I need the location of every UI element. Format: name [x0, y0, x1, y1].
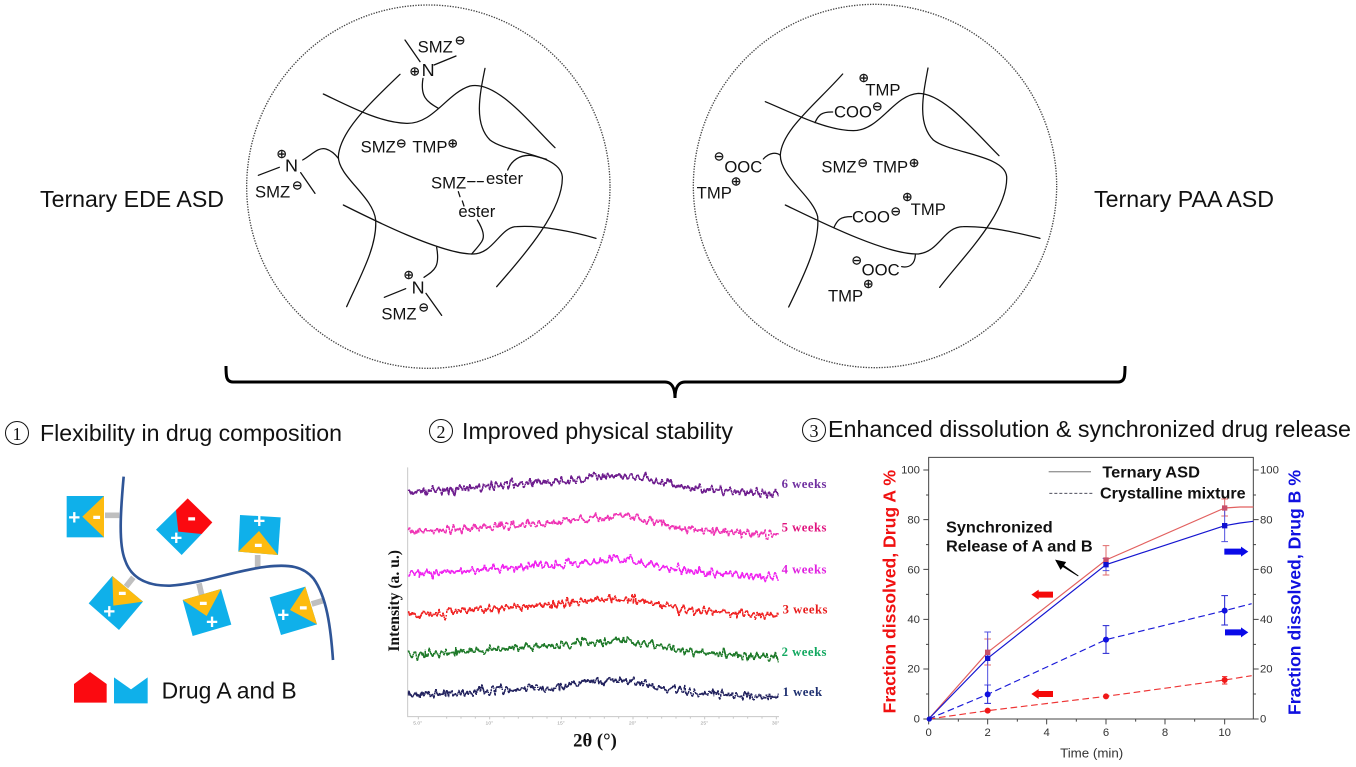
- label: Ternary EDE ASD: Ternary EDE ASD: [40, 186, 224, 212]
- arrow: black: [1056, 560, 1078, 576]
- heading 3: Enhanced dissolution & synchronized drug release: [828, 416, 1351, 442]
- chemical labels: ester: [486, 169, 523, 188]
- trace: 1 week: [408, 680, 778, 697]
- left axis numbers: 0: [914, 714, 920, 726]
- x axis title: Time (min): [1060, 745, 1123, 760]
- series labels: 1 week: [783, 685, 823, 699]
- x axis numbers: 0: [926, 727, 932, 739]
- series labels: [782, 477, 828, 699]
- chemical labels: ⊕: [858, 70, 869, 85]
- legend: drug A and B: Drug A and B: [162, 677, 297, 703]
- drug pair 6: [270, 587, 317, 635]
- chemical labels: ⊖: [418, 299, 429, 314]
- chemical labels: SMZ: [821, 157, 857, 176]
- drug pair 6: +: [277, 603, 289, 626]
- chemical labels: ⊖: [292, 178, 303, 193]
- series: drug B crystalline mixture: [929, 604, 1252, 719]
- chemical labels: [697, 70, 946, 306]
- polymer chains: [763, 68, 1040, 307]
- x axis numbers: 2: [985, 727, 991, 739]
- drug pair 1: -: [92, 500, 101, 530]
- right axis numbers: 60: [1260, 564, 1273, 576]
- series labels: 3 weeks: [783, 602, 828, 616]
- chemical labels: COO: [834, 103, 872, 122]
- origin marker: [927, 716, 932, 722]
- chemical labels: SMZ: [361, 137, 396, 156]
- trace: 3 weeks: [408, 599, 778, 616]
- chemical labels: ⊖: [396, 135, 407, 150]
- legend: drug A and B: [74, 672, 297, 703]
- trace: 4 weeks: [408, 559, 778, 577]
- x axis numbers: 6: [1103, 727, 1109, 739]
- right axis numbers: 40: [1260, 614, 1273, 626]
- tick labels: 20°: [629, 721, 636, 727]
- chemical labels: TMP: [865, 81, 901, 100]
- error bars: [984, 499, 1228, 703]
- drug pair 3: [238, 510, 281, 559]
- right axis numbers: 80: [1260, 514, 1273, 526]
- trace: 2 weeks: [408, 640, 778, 657]
- grey linkers: [105, 515, 325, 604]
- chemical labels: ⊕: [731, 173, 741, 188]
- chemical labels: ⊕: [276, 146, 287, 161]
- chemical labels: ⊕: [902, 189, 913, 204]
- right axis numbers: 20: [1260, 664, 1273, 676]
- series labels: 4 weeks: [782, 562, 827, 576]
- chart: XRD traces over time: [386, 467, 828, 752]
- chemical labels: SMZ: [418, 38, 453, 57]
- chemical labels: SMZ: [381, 304, 417, 323]
- right axis title: Fraction dissolved, Drug B %: [1285, 470, 1305, 715]
- plot frame and ticks: [923, 457, 1259, 724]
- arrow: red upper: [1031, 590, 1053, 600]
- drug pair 4: +: [103, 600, 115, 623]
- legend: Ternary ASD: [1102, 464, 1200, 481]
- x axis numbers: 8: [1162, 727, 1168, 739]
- chemical labels: ⊕: [403, 267, 414, 282]
- drug pair 5: -: [199, 586, 208, 616]
- drug pair 2: [156, 498, 212, 555]
- drug pair 5: +: [206, 611, 218, 634]
- tick labels: 5.0°: [413, 721, 422, 727]
- arrow: blue upper: [1224, 547, 1248, 557]
- heading 2: Improved physical stability: [462, 418, 733, 444]
- chemical labels: SMZ: [255, 183, 290, 202]
- heading 1: Flexibility in drug composition: [40, 420, 342, 446]
- chemical labels: ⊖: [851, 252, 862, 267]
- left axis numbers: 80: [907, 514, 920, 526]
- chemical labels: TMP: [873, 157, 908, 176]
- diagram: Ternary EDE ASD polymer network: [247, 5, 610, 368]
- chemical labels: ⊕: [409, 63, 420, 78]
- left axis numbers: [901, 464, 920, 726]
- legend: [1049, 464, 1246, 502]
- drug pair 5: [183, 586, 231, 636]
- chemical labels: TMP: [697, 184, 732, 203]
- chemical labels: ester: [458, 202, 496, 221]
- right axis numbers: 0: [1260, 714, 1266, 726]
- x axis numbers: 4: [1044, 727, 1050, 739]
- drug pair 1: +: [68, 506, 80, 529]
- chemical labels: COO: [852, 207, 890, 226]
- legend: Crystalline mixture: [1100, 485, 1246, 502]
- axes: [408, 467, 779, 719]
- diagram: Ternary PAA ASD polymer network: [693, 4, 1057, 368]
- heading 2: 2: [436, 422, 446, 442]
- x axis title: 2θ (°): [573, 731, 617, 752]
- chemical labels: N: [285, 156, 298, 176]
- y axis title: Intensity (a. u.): [386, 550, 403, 652]
- drug pair 6: -: [299, 591, 308, 621]
- tick labels: [413, 721, 779, 727]
- dotted circle: [247, 5, 610, 368]
- left axis numbers: 60: [907, 564, 920, 576]
- left axis numbers: 40: [907, 614, 920, 626]
- series: drug A ternary ASD: [929, 505, 1253, 719]
- chemical labels: TMP: [412, 137, 448, 156]
- chemical labels: ⊖: [890, 204, 901, 219]
- arrow: red lower: [1031, 689, 1053, 699]
- heading 1: 1: [12, 424, 22, 444]
- series: drug A crystalline mixture: [929, 676, 1252, 719]
- drug pair 2: +: [170, 526, 182, 549]
- polymer chains: [258, 40, 596, 315]
- drug pair 1: [67, 496, 104, 537]
- drug pair 3: +: [253, 510, 265, 533]
- trace: 6 weeks: [408, 475, 778, 493]
- chemical labels: TMP: [828, 287, 863, 306]
- chemical labels: OOC: [724, 157, 762, 176]
- label: Ternary PAA ASD: Ternary PAA ASD: [1094, 186, 1274, 212]
- curly brace: [226, 366, 1125, 398]
- drug pair 2: -: [187, 502, 196, 532]
- chemical labels: N: [412, 277, 425, 297]
- polymer chain: [121, 477, 333, 660]
- chemical labels: ⊖: [857, 155, 868, 170]
- chemical labels: OOC: [862, 260, 900, 279]
- tick labels: 15°: [557, 721, 565, 727]
- tick labels: 10°: [486, 721, 493, 727]
- x axis numbers: [926, 727, 1231, 739]
- left axis title: Fraction dissolved, Drug A %: [880, 470, 900, 713]
- chemical labels: ⊕: [863, 276, 874, 291]
- trace: 5 weeks: [408, 517, 778, 535]
- panel: flexibility in drug composition: [67, 477, 333, 703]
- chemical labels: N: [422, 60, 435, 80]
- drug pair 3: -: [254, 529, 263, 559]
- chemical labels: SMZ: [431, 173, 466, 192]
- left axis numbers: 100: [901, 464, 920, 476]
- annotation: release of A and B: Release of A and B: [946, 539, 1093, 556]
- chemical labels: ⊖: [714, 148, 724, 163]
- tick labels: 30°: [772, 721, 779, 727]
- heading 3: 3: [810, 421, 818, 441]
- series labels: 6 weeks: [782, 477, 827, 491]
- series labels: 5 weeks: [782, 520, 827, 534]
- chemical labels: ⊕: [447, 135, 458, 150]
- annotation: synchronized release: Synchronized: [946, 519, 1053, 536]
- dotted circle: [693, 4, 1057, 368]
- chemical labels: TMP: [911, 200, 946, 219]
- chemical labels: ⊖: [872, 99, 883, 114]
- chemical labels: ⊖: [455, 33, 465, 48]
- right axis numbers: [1260, 464, 1279, 726]
- chemical labels: ⊕: [909, 155, 919, 170]
- series: drug B ternary ASD: [929, 521, 1253, 719]
- chemical labels: [255, 33, 523, 323]
- x axis numbers: 10: [1218, 727, 1231, 739]
- arrow: blue lower: [1225, 627, 1248, 637]
- chart: dissolution profile: [880, 457, 1305, 760]
- right axis numbers: 100: [1260, 464, 1279, 476]
- tick labels: 25°: [701, 721, 708, 727]
- left axis numbers: 20: [907, 664, 920, 676]
- drug pair 4: -: [118, 577, 127, 607]
- series labels: 2 weeks: [782, 645, 827, 659]
- drug pair 4: [89, 576, 143, 630]
